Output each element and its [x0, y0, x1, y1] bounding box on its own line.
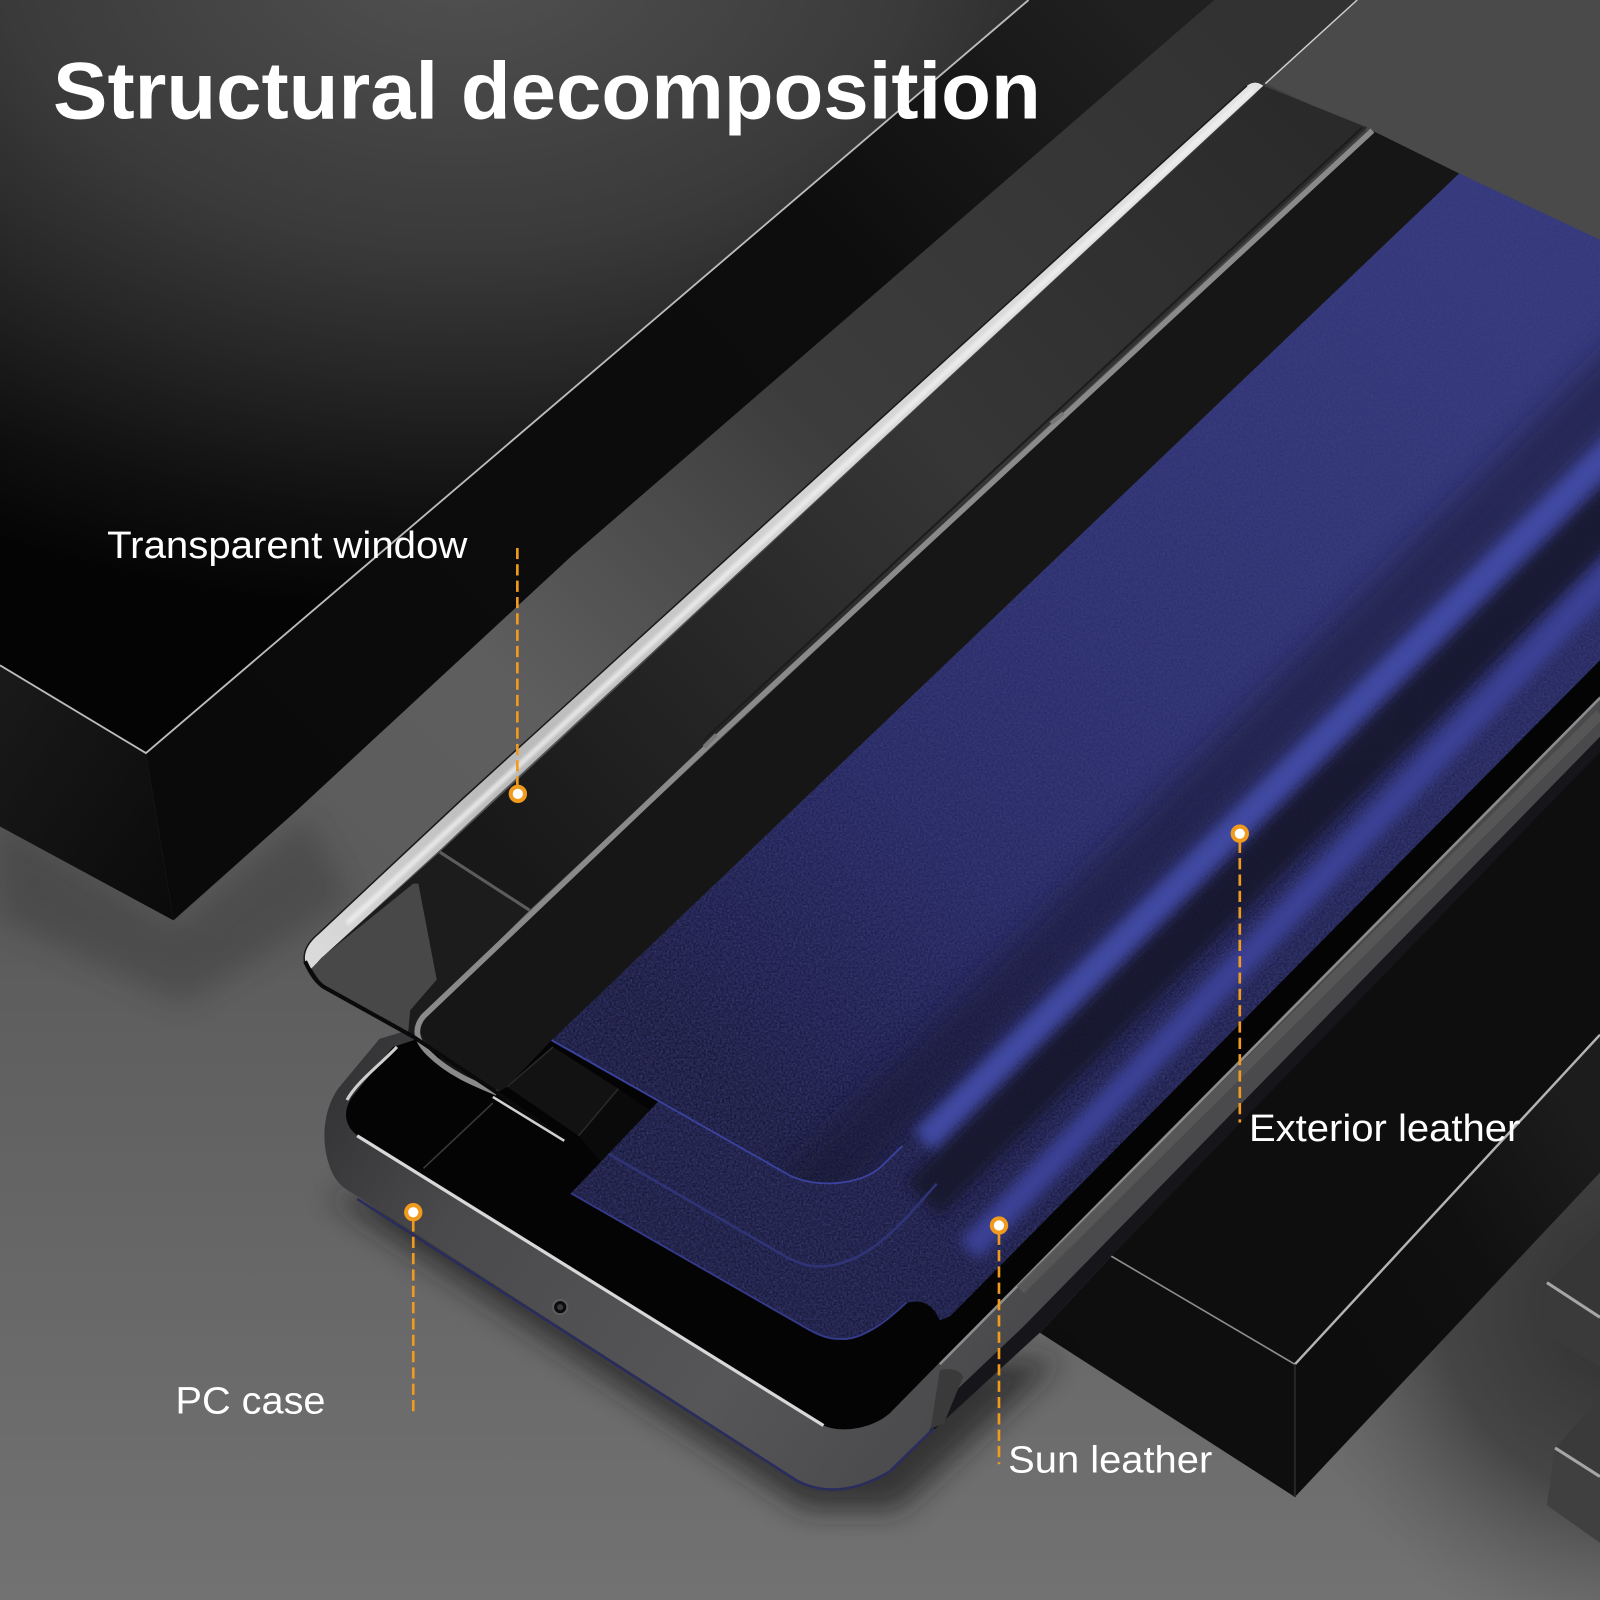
callout: Exterior leather: Exterior leather — [1249, 1107, 1520, 1149]
callout: Sun leather — [992, 1218, 1212, 1480]
thin hinge wire at top — [1265, 0, 1357, 84]
sun leather flap — [570, 476, 1600, 1340]
screen panels visible below window — [507, 1047, 650, 1163]
floor behind the window at top right — [1265, 0, 1600, 240]
fold highlight on leather — [923, 388, 1600, 1141]
camera hole — [553, 1300, 567, 1314]
floor shading at lower right — [1255, 959, 1600, 1600]
PC case — [324, 653, 1600, 1489]
floor band between box and window — [173, 0, 1357, 969]
callout: Sun leather: Sun leather — [1008, 1438, 1212, 1480]
callout: PC case: PC case — [176, 1379, 326, 1421]
callout: PC case — [176, 1205, 420, 1421]
callout: Transparent window: Transparent window — [107, 524, 468, 566]
transparent window — [304, 83, 1459, 1141]
upper-left black box — [0, 0, 1214, 920]
callout: Transparent window — [107, 524, 525, 801]
small gray boxes at right edge — [1543, 1230, 1600, 1543]
exterior leather flap — [541, 163, 1600, 1224]
title: Structural decomposition — [53, 46, 1041, 136]
phone shadow on floor — [327, 1194, 1061, 1510]
lower-right black box — [1040, 653, 1600, 1497]
callout: Exterior leather — [1233, 827, 1520, 1149]
upper-left box shadow — [0, 816, 352, 1005]
